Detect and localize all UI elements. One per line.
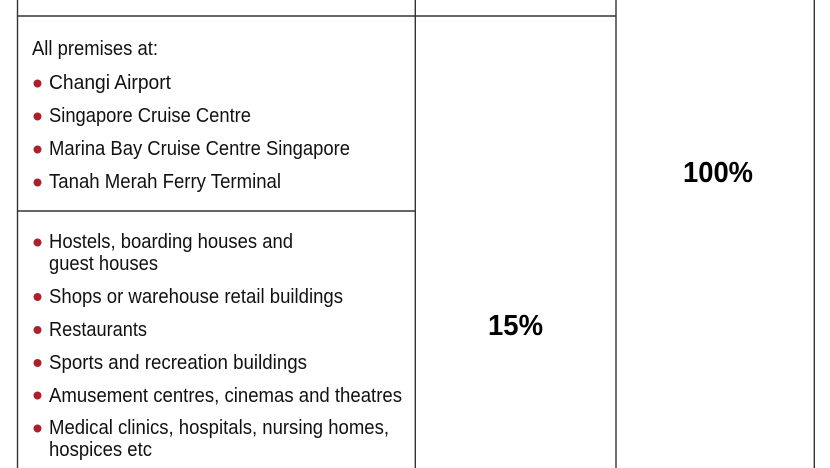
list item: hostels: Hostels, boarding houses and [49,231,293,253]
list item: medical [34,417,389,461]
list item: sports: Sports and recreation buildings [49,352,307,374]
list item: medical: Medical clinics, hospitals, nursing homes, [49,417,389,439]
list item: Singapore Cruise Centre: Singapore Cruise Centre [49,105,251,127]
list item: shops: Shops or warehouse retail buildings [49,286,343,308]
list item: restaurants: Restaurants [49,319,147,341]
text: all premises at: All premises at: [32,38,158,60]
list item: hostels [34,231,293,275]
panel: airport and terminal premises [32,38,350,193]
value: 100%: 100% [683,157,753,189]
list item: hostels: guest houses [49,253,158,275]
list item: medical: hospices etc [49,439,152,461]
list item: Tanah Merah Ferry Terminal: Tanah Merah Ferry Terminal [49,171,281,193]
list item: amusement: Amusement centres, cinemas and theatres [49,385,402,407]
list item: Marina Bay Cruise Centre Singapore: Marina Bay Cruise Centre Singapore [49,138,350,160]
list item: Changi Airport: Changi Airport [49,72,171,94]
value: 15%: 15% [488,310,543,342]
panel: other building types [34,231,402,461]
